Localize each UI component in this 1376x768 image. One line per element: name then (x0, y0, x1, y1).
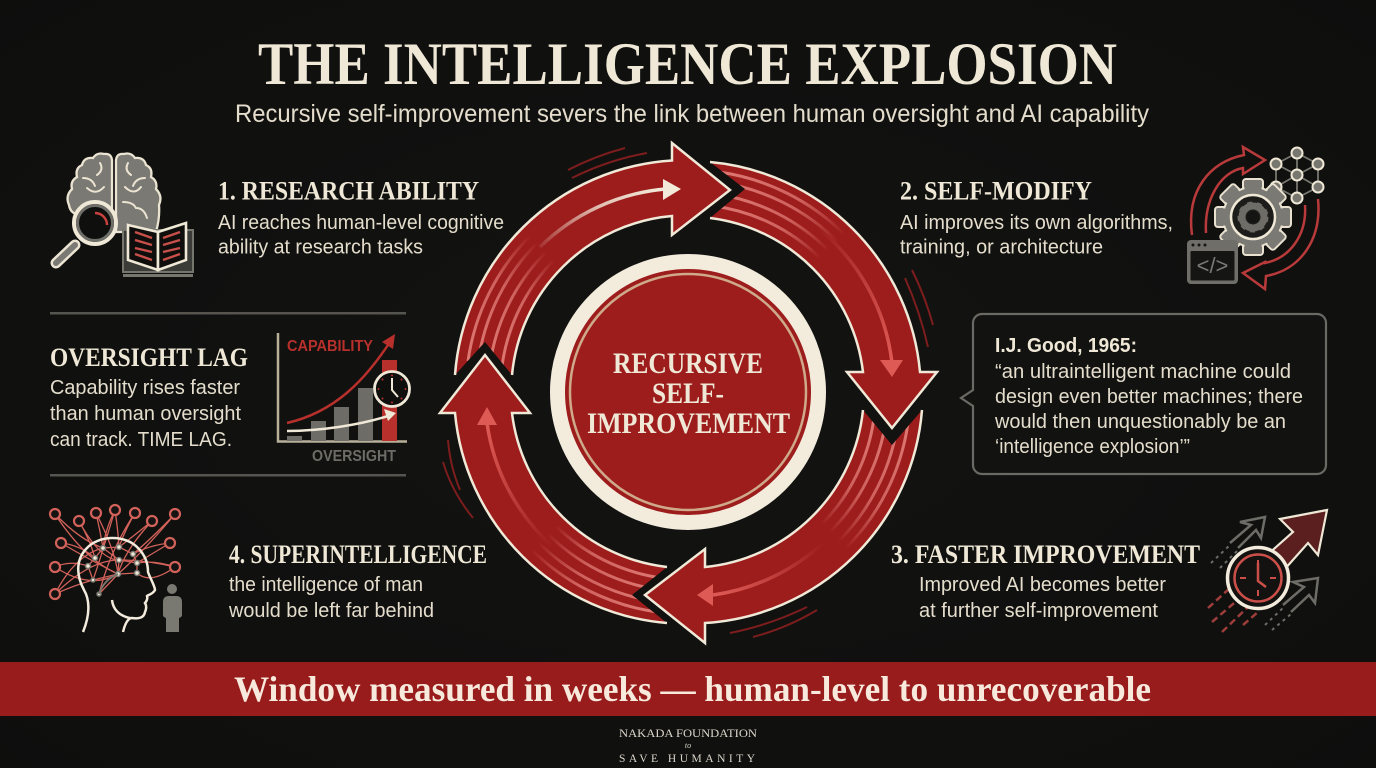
oversight label: OVERSIGHT (312, 448, 396, 465)
clock (374, 372, 410, 406)
small human figure (163, 584, 182, 632)
icon: clock with rising arrows (1208, 510, 1327, 632)
oversight lag text: Capability rises faster (50, 377, 240, 399)
footer logo: SAVE HUMANITY (619, 753, 759, 765)
callout: I.J. Good quote (961, 314, 1326, 474)
arrow 1: top-left arc (455, 143, 730, 375)
banner text: Window measured in weeks — human-level to unrecoverable (234, 669, 1151, 709)
step 2 heading: 2. SELF-MODIFY (900, 176, 1092, 206)
quote text: ‘intelligence explosion’” (995, 436, 1190, 458)
step 4 text (228, 574, 434, 622)
hub label: SELF- (652, 377, 724, 410)
oversight curve (287, 409, 396, 431)
banner (0, 662, 1376, 716)
step 1 text (218, 212, 504, 258)
icon: brain, magnifier and book (56, 154, 193, 277)
quote text: design even better machines; there (995, 386, 1303, 408)
quote text: “an ultraintelligent machine could (995, 361, 1291, 383)
footer logo: to (685, 741, 691, 750)
step 1 text: ability at research tasks (218, 236, 423, 258)
step 3 heading: 3. FASTER IMPROVEMENT (891, 539, 1200, 569)
arrow 3: bottom-right arc (645, 410, 922, 643)
panel: oversight lag (50, 312, 410, 476)
capability label: CAPABILITY (287, 338, 374, 355)
hub label (587, 347, 790, 440)
subtitle: Recursive self-improvement severs the link between human oversight and AI capability (235, 100, 1149, 128)
chart: capability vs oversight (278, 333, 410, 465)
title: THE INTELLIGENCE EXPLOSION (258, 31, 1117, 97)
step 3 text: at further self-improvement (919, 600, 1158, 622)
quote attribution: I.J. Good, 1965: (995, 335, 1137, 357)
panel: step 1 research ability (56, 154, 504, 277)
hub label: RECURSIVE (613, 347, 763, 380)
footer logo (619, 728, 759, 765)
panel: step 4 superintelligence (50, 505, 487, 632)
step 2 text: AI improves its own algorithms, (900, 212, 1173, 234)
oversight lag heading: OVERSIGHT LAG (50, 342, 248, 372)
oversight lag text: can track. TIME LAG. (50, 429, 232, 451)
panel: step 2 self-modify (900, 147, 1324, 289)
step 1 heading: 1. RESEARCH ABILITY (218, 176, 479, 206)
step 2 text (900, 212, 1173, 258)
capability curve (287, 334, 395, 423)
step 4 text: would be left far behind (228, 600, 434, 622)
arrow 4: bottom-left arc (440, 355, 667, 623)
hub label: IMPROVEMENT (587, 407, 790, 440)
icon: gear, network and code window: </> (1197, 253, 1228, 278)
step 3 text: Improved AI becomes better (919, 574, 1166, 596)
step 4 heading: 4. SUPERINTELLIGENCE (229, 539, 487, 569)
icon: head with neural network and small human (50, 505, 182, 632)
oversight lag text (50, 377, 241, 451)
step 3 text (919, 574, 1166, 622)
arrow 2: top-right arc (710, 162, 937, 428)
step 4 text: the intelligence of man (229, 574, 423, 596)
bars (287, 360, 397, 441)
panel: step 3 faster improvement (891, 510, 1327, 632)
footer logo: NAKADA FOUNDATION (619, 728, 758, 740)
center hub (558, 262, 818, 522)
step 1 text: AI reaches human-level cognitive (218, 212, 504, 234)
cycle diagram (440, 143, 937, 643)
quote text: would then unquestionably be an (994, 411, 1286, 433)
oversight lag text: than human oversight (50, 403, 241, 425)
motion streaks (443, 148, 933, 637)
step 2 text: training, or architecture (900, 236, 1103, 258)
icon: gear, network and code window (1187, 147, 1324, 289)
quote text (994, 361, 1303, 458)
